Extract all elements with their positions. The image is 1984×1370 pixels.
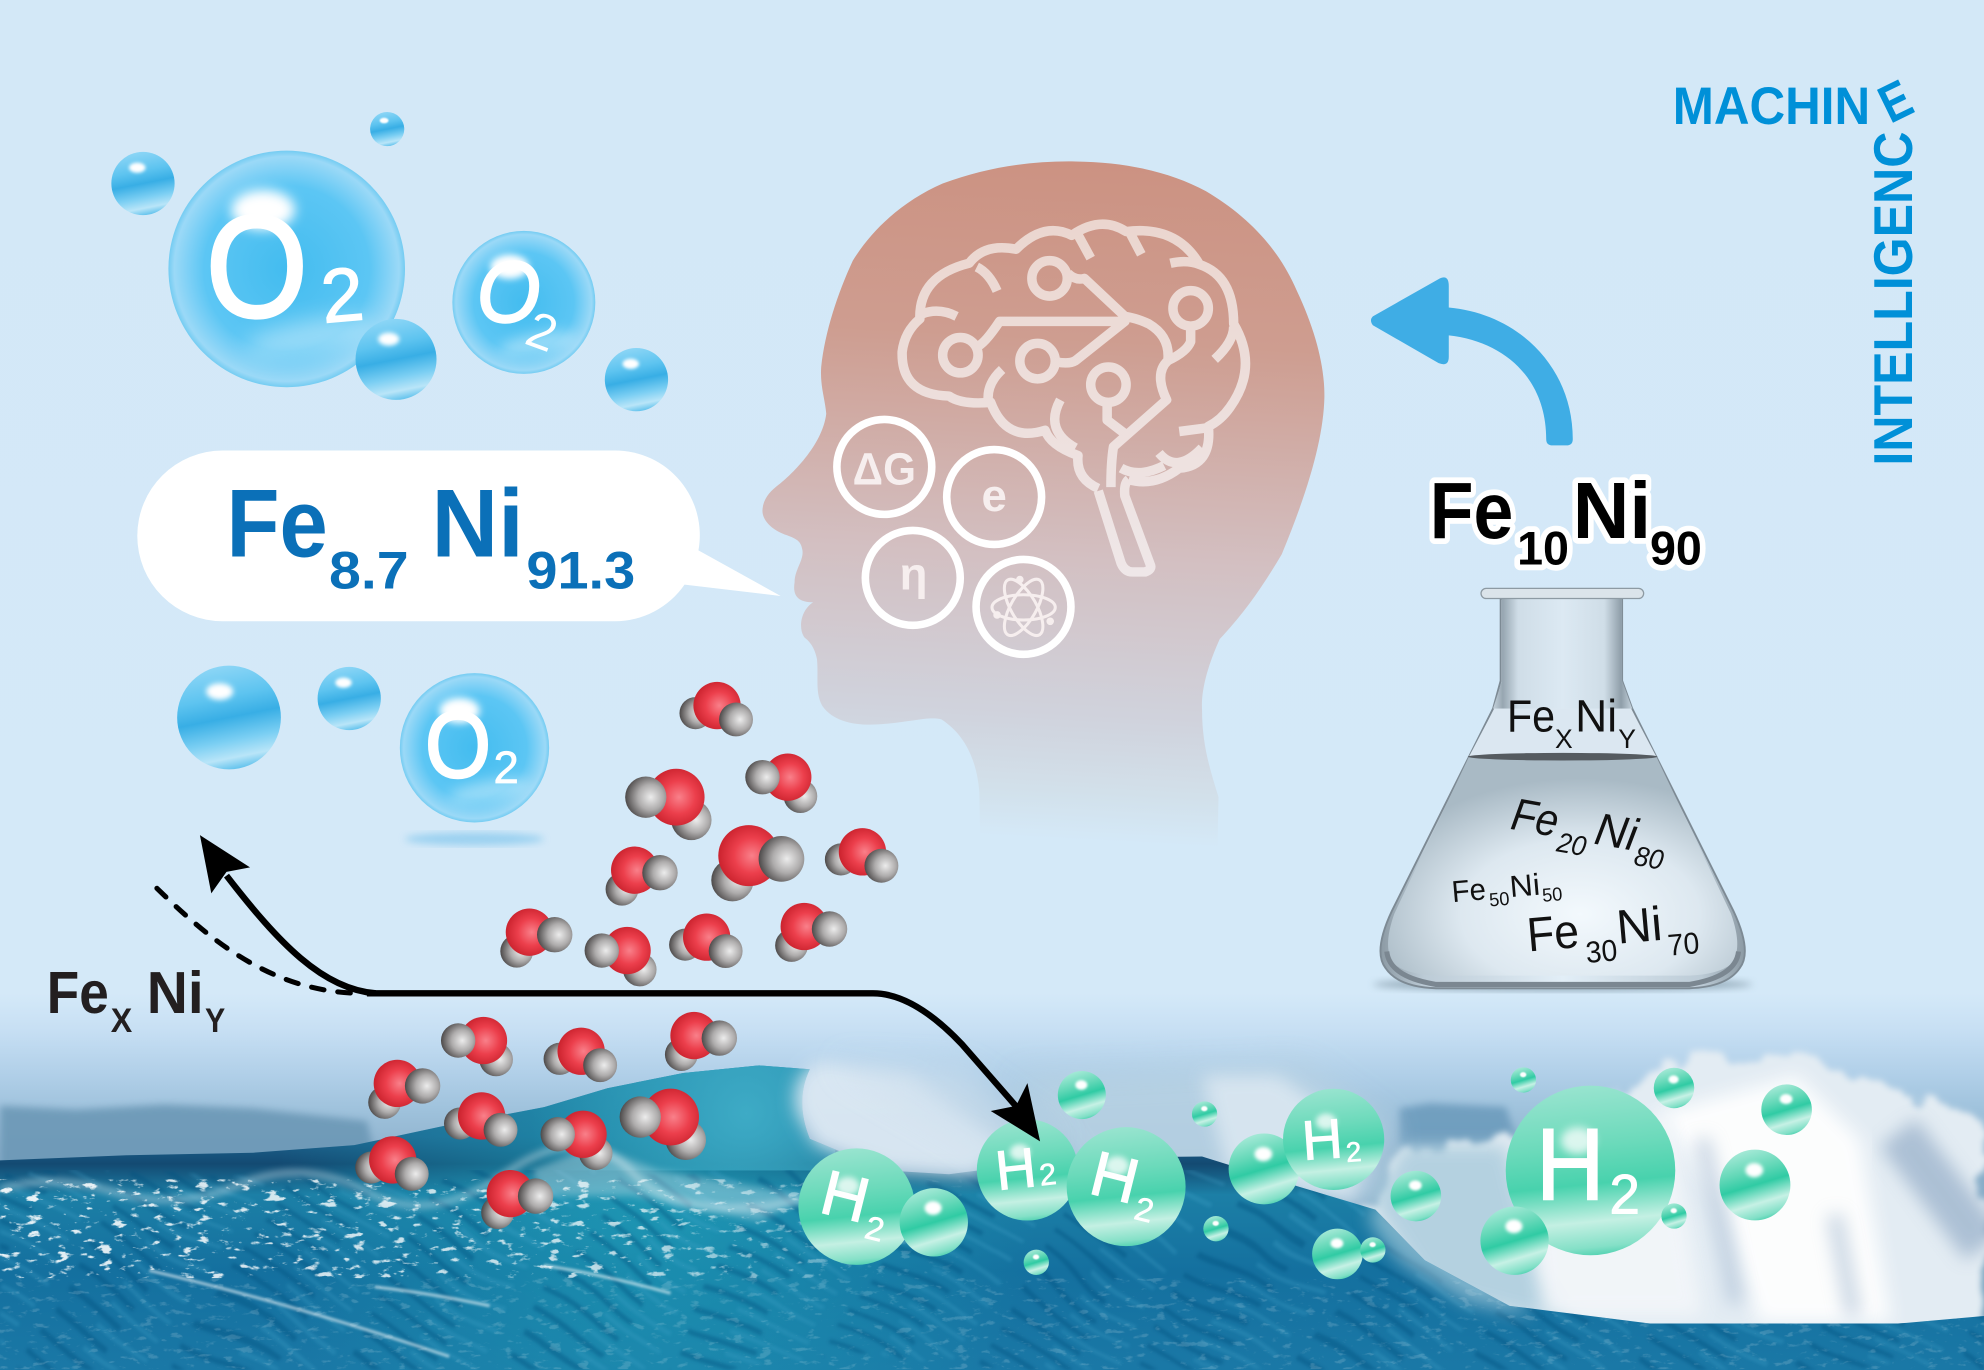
flask text: Fe30Ni70 [1525,894,1701,975]
flask text: Fe50Ni50: Fe [1450,873,1487,909]
logo: Machine Intelligence: MACHIN [1673,77,1870,136]
label: FeX NiY [47,959,225,1040]
callout: predicted composition: Ni [431,471,524,578]
flask text: Fe20Ni80: 80 [1632,840,1666,876]
bubbles: small hydrogen group [1024,1071,1441,1279]
flask text: Fe30Ni70: 30 [1584,934,1619,970]
ocean wave backdrop [0,1050,1984,1370]
bubble: small right [605,348,668,411]
bubble: italic O2 [452,231,595,374]
bubble: H2 centre right: H [1083,1138,1146,1218]
bubble: H2 left: 2 [861,1208,888,1249]
bubble: tiny top [370,112,404,146]
bubble: H2 large: H [1536,1109,1604,1222]
bubble: italic O2: 2 [519,300,565,363]
arrow: blue feedback [1371,277,1573,445]
flask text: Fe30Ni70: Fe [1525,904,1581,963]
bubble: H2 left: H [814,1157,876,1237]
bubble: overlap small [356,319,437,400]
bubble: H2 large: 2 [1609,1163,1640,1225]
bubble: lower O2 with shadow [400,673,549,845]
flask text: FeXNiY: X [1555,724,1573,754]
flask text: Fe20Ni80: 20 [1554,826,1589,862]
arrow: solid path to oxygen [226,876,376,993]
flask text: Fe50Ni50: Ni [1508,869,1541,904]
flask text: Fe50Ni50 [1450,867,1563,915]
bubble: H2 upper right: 2 [1345,1136,1363,1168]
ocean water [0,1065,1984,1370]
label: Fe10Ni90: 10 [1517,522,1569,574]
label: FeX NiY: Y [205,1002,225,1040]
arrow head: oxygen [200,835,250,893]
bubble: lower left [177,666,281,769]
bubble: large O2 [168,151,405,387]
callout: predicted composition: 91.3 [526,541,635,600]
flask text: FeXNiY [1507,690,1636,754]
icon: atom circle [976,559,1071,654]
flask text: Fe50Ni50: 50 [1488,889,1510,912]
flask text: Fe20Ni80 [1506,788,1672,876]
bubble: large O2: 2 [318,251,367,340]
label: Fe10Ni90 [1430,466,1702,574]
head silhouette with brain [762,161,1324,860]
water molecules [355,682,898,1229]
bubbles: small hydrogen right group [1480,1067,1812,1275]
callout: predicted composition: Fe [226,471,328,578]
icon: e circle: e [981,470,1007,521]
arrow: path to hydrogen [367,993,1040,1141]
logo: Machine Intelligence: INTELLIGENC [1863,132,1924,466]
label: Fe10Ni90: 90 [1650,522,1702,574]
flask text: FeXNiY: Y [1618,724,1636,754]
bubble: H2 centre: 2 [1038,1158,1058,1193]
bubble: large O2: O [206,185,307,347]
flask text: Fe20Ni80: Ni [1591,803,1643,861]
callout: predicted composition: 8.7 [329,541,409,600]
flask base rim [1387,952,1739,984]
bubble: H2 centre [977,1119,1078,1221]
flask liquid [1388,757,1737,976]
bubble: H2 upper right: H [1300,1107,1345,1172]
icon: delta G circle [837,419,932,514]
flask shoulder highlight [1469,709,1656,757]
arrow shaft [367,993,1022,1114]
bubble: H2 large [1506,1086,1675,1255]
bubble: beside left [900,1188,968,1256]
logo: Machine Intelligence [1673,69,1924,466]
flask text: FeXNiY: Fe [1507,690,1555,741]
bubble: H2 centre right [1067,1127,1186,1246]
hydrogen bubbles [798,1067,1812,1279]
label: Fe10Ni90: Fe [1430,466,1513,555]
bubble: H2 left [798,1148,915,1265]
flask text: Fe50Ni50: 50 [1541,884,1563,907]
flask neck [1493,599,1632,709]
bubble: lower O2 with shadow: O [425,692,491,797]
flask rim [1481,588,1644,599]
flask shadow [1373,978,1752,991]
bubble: H2 centre right: 2 [1131,1189,1158,1230]
liquid surface [1468,753,1658,760]
flask body [1380,599,1745,988]
icon: delta G circle: ΔG [853,444,916,495]
flask with compositions [1373,588,1752,991]
logo: Machine Intelligence: E [1870,69,1922,135]
callout: predicted composition [137,450,781,621]
bubble: H2 upper right [1283,1089,1384,1190]
flask text: Fe30Ni70: 70 [1666,927,1701,963]
icon: eta circle: η [900,549,927,600]
bubble: H2 centre: H [992,1136,1039,1202]
flask text: Fe30Ni70: Ni [1614,897,1664,955]
flask text: FeXNiY: Ni [1575,690,1617,741]
icon: eta circle [865,530,960,625]
head shape [762,161,1324,860]
label: FeX NiY: Ni [147,959,204,1026]
bubble: lower O2 with shadow: 2 [493,742,519,793]
arrow: dashed alternative path [157,888,363,993]
label: FeX NiY: X [111,1002,132,1040]
bubble: italic O2: O [477,244,540,340]
reaction pathway arrows [157,835,376,993]
arrow head [991,1083,1040,1141]
label: Fe10Ni90: Ni [1573,466,1651,555]
oxygen bubbles [111,112,668,845]
icon: e circle [947,450,1042,544]
label: FeX NiY: Fe [47,959,109,1026]
bubble: small top left [111,152,175,215]
bubble: lower small [318,667,381,730]
flask text: Fe20Ni80: Fe [1508,788,1563,847]
icon: circuit brain [902,224,1245,572]
